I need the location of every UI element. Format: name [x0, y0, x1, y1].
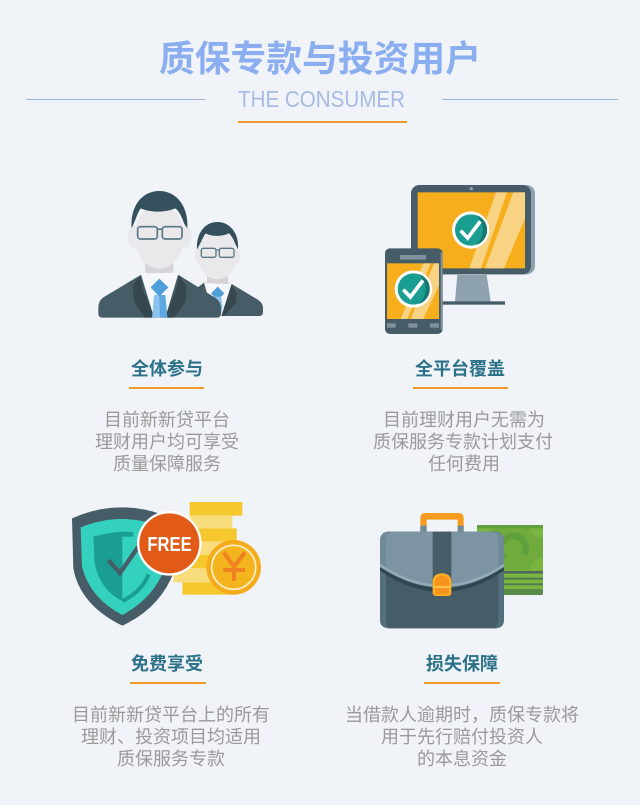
heading: 损失保障: 损失保障: [426, 653, 498, 674]
text block: 用于先行赔付投资人: [381, 727, 543, 747]
text block: 理财用户均可享受: [95, 432, 239, 452]
text block: [95, 410, 239, 474]
text block: [72, 705, 270, 769]
text block: 质保服务专款: [117, 749, 225, 769]
icon: shield with free badge and coins: [72, 502, 261, 626]
subtitle: THE CONSUMER: [238, 86, 405, 112]
text block: 理财、投资项目均适用: [81, 727, 261, 747]
text block: 的本息资金: [417, 749, 507, 769]
text block: 质保服务专款计划支付: [373, 432, 553, 452]
heading: 免费享受: 免费享受: [131, 653, 203, 674]
text block: 质量保障服务: [113, 454, 221, 474]
text block: [373, 410, 553, 474]
icon: monitor and phone: [385, 185, 535, 334]
text block: 目前理财用户无需为: [383, 410, 545, 430]
text block: 目前新新贷平台上的所有: [72, 705, 270, 725]
heading: 全体参与: 全体参与: [131, 358, 203, 379]
panel: loss protection: [345, 513, 579, 769]
header: [26, 38, 618, 123]
text block: 目前新新贷平台: [104, 410, 230, 430]
panel: all platforms: [373, 185, 553, 474]
icon: two businessmen: [98, 191, 263, 318]
heading: 全平台覆盖: 全平台覆盖: [415, 358, 505, 379]
text block: [345, 701, 579, 769]
text block: 当借款人逾期时，质保专款将: [345, 701, 579, 727]
panel: full participation: [95, 191, 263, 474]
badge text: FREE: FREE: [147, 534, 192, 556]
text block: 任何费用: [428, 454, 500, 474]
panel: free of charge: [72, 502, 270, 769]
icon: briefcase and cash: [380, 513, 543, 628]
title: 质保专款与投资用户: [159, 38, 481, 79]
